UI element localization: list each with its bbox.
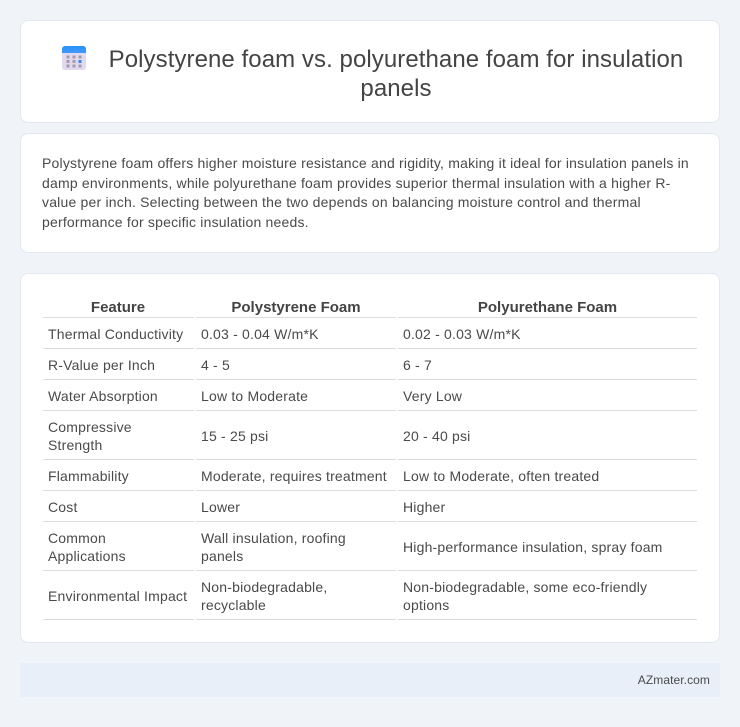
icon: calendar (62, 46, 86, 70)
table row: compressive strength: 15 - 25 psi (201, 428, 268, 444)
summary text: value per inch. Selecting between the two depends on balancing moisture control and thermal (42, 194, 641, 210)
table row: common applications: Wall insulation, roofing (201, 530, 346, 546)
table row: environmental impact: Non-biodegradable, (201, 579, 327, 595)
table row: thermal conductivity (48, 326, 521, 342)
table row: common applications (48, 530, 663, 564)
table header: Polyurethane Foam (478, 299, 617, 316)
table row: environmental impact: Environmental Impact (48, 588, 187, 604)
table row: cost: Lower (201, 499, 240, 515)
table row: water absorption: Very Low (403, 388, 462, 404)
table row: flammability: Moderate, requires treatment (201, 468, 387, 484)
table row: compressive strength: 20 - 40 psi (403, 428, 470, 444)
table row: common applications: Common (48, 530, 106, 546)
title: Polystyrene foam vs. polyurethane foam for insulation panels (109, 46, 683, 102)
panel: summary (20, 133, 720, 253)
table header: Feature (91, 299, 145, 316)
table row: r-value: 4 - 5 (201, 357, 230, 373)
summary text: Polystyrene foam offers higher moisture resistance and rigidity, making it ideal for insulation panels in (42, 155, 689, 171)
table row: environmental impact: recyclable (201, 597, 266, 613)
table row: flammability: Flammability (48, 468, 129, 484)
table row: water absorption: Low to Moderate (201, 388, 308, 404)
table row: common applications: High-performance insulation, spray foam (403, 539, 663, 555)
table row: r-value (48, 357, 432, 373)
summary text: damp environments, while polyurethane foam provides superior thermal insulation with a higher R- (42, 175, 671, 191)
table row: flammability: Low to Moderate, often treated (403, 468, 599, 484)
table row: cost: Cost (48, 499, 78, 515)
table row: water absorption: Water Absorption (48, 388, 158, 404)
table row: environmental impact: Non-biodegradable, some eco-friendly (403, 579, 647, 595)
table row: thermal conductivity: 0.03 - 0.04 W/m*K (201, 326, 319, 342)
table row: compressive strength: Compressive (48, 419, 132, 435)
table row: environmental impact: options (403, 597, 449, 613)
table row: common applications: panels (201, 548, 243, 564)
summary text (42, 155, 689, 230)
table header: Polystyrene Foam (231, 299, 361, 316)
footer source text: AZmater.com (638, 673, 710, 687)
panel: title card (20, 20, 720, 123)
table row: cost: Higher (403, 499, 445, 515)
table row: r-value: R-Value per Inch (48, 357, 155, 373)
table row: common applications: Applications (48, 548, 126, 564)
table row: cost (48, 499, 445, 515)
table row: environmental impact (48, 579, 647, 613)
table row: compressive strength: Strength (48, 437, 102, 453)
table row: thermal conductivity: 0.02 - 0.03 W/m*K (403, 326, 521, 342)
table row: flammability (48, 468, 599, 484)
table row: compressive strength (48, 419, 470, 453)
panel: comparison table (20, 273, 720, 643)
summary text: performance for specific insulation needs. (42, 214, 309, 230)
table row: water absorption (48, 388, 462, 404)
footer bar (20, 663, 720, 697)
table row: r-value: 6 - 7 (403, 357, 432, 373)
table row: thermal conductivity: Thermal Conductivity (48, 326, 183, 342)
